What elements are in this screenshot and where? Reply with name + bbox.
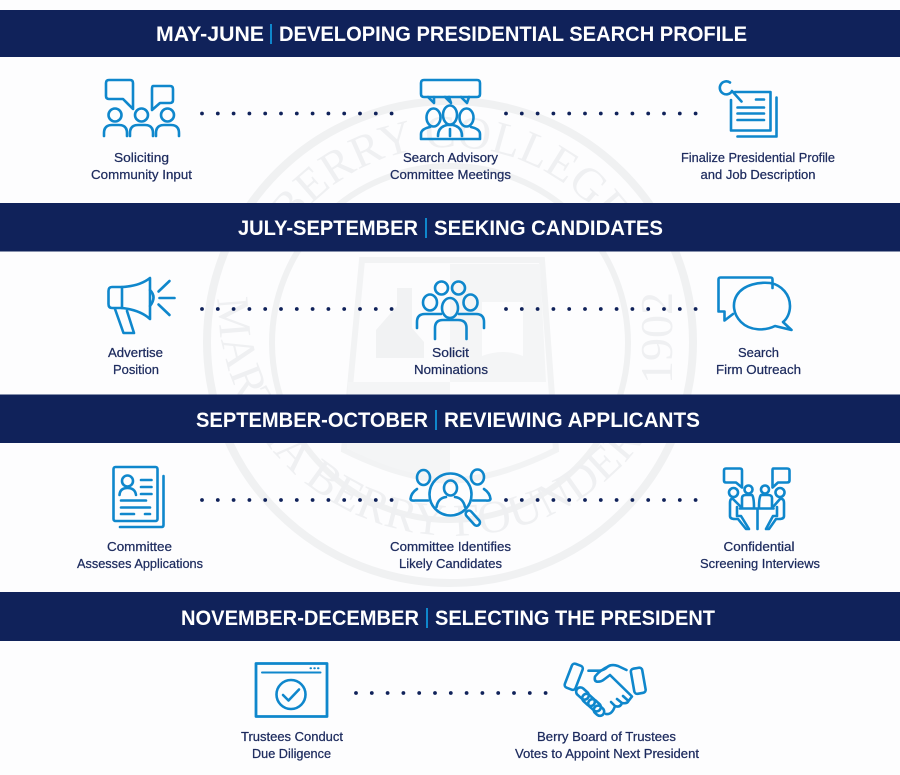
watermark: college seal: BERRY COLLEGE xyxy=(272,117,628,203)
dotted connector xyxy=(202,112,393,115)
icon: search firm speech bubbles xyxy=(718,278,792,330)
heading: November-December: SELECTING THE PRESIDENT xyxy=(435,607,715,630)
heading: July-September xyxy=(0,203,900,252)
label: Confidential Screening Interviews: Confidential xyxy=(724,539,795,554)
icon: application document xyxy=(114,467,164,527)
heading: September-October: SEPTEMBER-OCTOBER xyxy=(196,409,428,432)
label: Search Firm Outreach: Search xyxy=(738,345,779,360)
icon: screening interview table xyxy=(724,468,790,529)
dotted connector xyxy=(506,307,696,311)
label: Berry Board of Trustees Votes to Appoint Next President xyxy=(515,729,699,761)
label: Finalize Presidential Profile and Job Description: Finalize Presidential Profile xyxy=(681,150,835,165)
label: Search Advisory Committee Meetings: Search Advisory xyxy=(403,150,499,165)
label: Soliciting Community Input: Soliciting xyxy=(114,150,169,165)
label: Berry Board of Trustees Votes to Appoint Next President: Votes to Appoint Next President xyxy=(515,746,699,761)
watermark: college seal xyxy=(203,98,697,587)
icon: group of nominees xyxy=(417,282,484,339)
label: Solicit Nominations: Nominations xyxy=(414,362,489,377)
icon: handshake xyxy=(564,663,646,718)
icon: magnifier over candidates xyxy=(410,470,490,527)
dotted connector xyxy=(202,498,393,502)
panel: November-December xyxy=(0,592,900,761)
label: Soliciting Community Input xyxy=(91,150,192,182)
heading: July-September: JULY-SEPTEMBER xyxy=(238,217,418,240)
icon: megaphone xyxy=(108,278,174,333)
dotted connector xyxy=(356,691,547,695)
label: Trustees Conduct Due Diligence xyxy=(241,729,343,761)
label: Finalize Presidential Profile and Job Description xyxy=(681,150,835,182)
label: Committee Identifies Likely Candidates: Likely Candidates xyxy=(399,556,502,571)
label: Committee Identifies Likely Candidates xyxy=(390,539,512,571)
dotted connector xyxy=(506,112,696,115)
label: Finalize Presidential Profile and Job Description: and Job Description xyxy=(700,167,816,182)
heading: July-September: SEEKING CANDIDATES xyxy=(434,217,663,240)
label: Committee Assesses Applications: Committee xyxy=(107,539,172,554)
label: Advertise Position: Advertise xyxy=(108,345,163,360)
heading: May-June: DEVELOPING PRESIDENTIAL SEARCH PROFILE xyxy=(279,23,747,46)
label: Solicit Nominations: Solicit xyxy=(432,345,469,360)
watermark: college seal: 1902 xyxy=(631,292,682,384)
label: Committee Identifies Likely Candidates: Committee Identifies xyxy=(390,539,512,554)
watermark: college seal: MARTHA BERRY FOUNDER xyxy=(218,297,642,536)
label: Solicit Nominations xyxy=(414,345,489,377)
heading: May-June xyxy=(0,10,900,57)
icon: community input speech bubbles and people xyxy=(104,80,179,136)
icon: profile document with hook xyxy=(720,81,776,136)
dotted connector xyxy=(506,498,696,502)
label: Advertise Position xyxy=(108,345,163,377)
heading: November-December xyxy=(0,592,900,641)
label: Soliciting Community Input: Community Input xyxy=(91,167,192,182)
label: Confidential Screening Interviews: Screening Interviews xyxy=(700,556,820,571)
label: Trustees Conduct Due Diligence: Due Diligence xyxy=(252,746,331,761)
icon: advisory committee meeting xyxy=(421,80,480,139)
label: Search Firm Outreach xyxy=(716,345,801,377)
heading: May-June: MAY-JUNE xyxy=(156,23,264,46)
label: Confidential Screening Interviews xyxy=(700,539,820,571)
icon: browser window with check mark xyxy=(256,664,327,716)
panel: July-September xyxy=(0,203,900,377)
label: Advertise Position: Position xyxy=(113,362,159,377)
label: Search Advisory Committee Meetings xyxy=(390,150,511,182)
label: Committee Assesses Applications xyxy=(77,539,203,571)
heading: September-October xyxy=(0,394,900,443)
label: Committee Assesses Applications: Assesses Applications xyxy=(77,556,203,571)
label: Search Advisory Committee Meetings: Committee Meetings xyxy=(390,167,511,182)
label: Search Firm Outreach: Firm Outreach xyxy=(716,362,801,377)
label: Berry Board of Trustees Votes to Appoint Next President: Berry Board of Trustees xyxy=(537,729,677,744)
panel: May-June xyxy=(0,10,900,182)
heading: November-December: NOVEMBER-DECEMBER xyxy=(181,607,419,630)
label: Trustees Conduct Due Diligence: Trustees Conduct xyxy=(241,729,343,744)
heading: September-October: REVIEWING APPLICANTS xyxy=(444,409,700,432)
panel: September-October xyxy=(0,394,900,571)
dotted connector xyxy=(202,307,393,311)
